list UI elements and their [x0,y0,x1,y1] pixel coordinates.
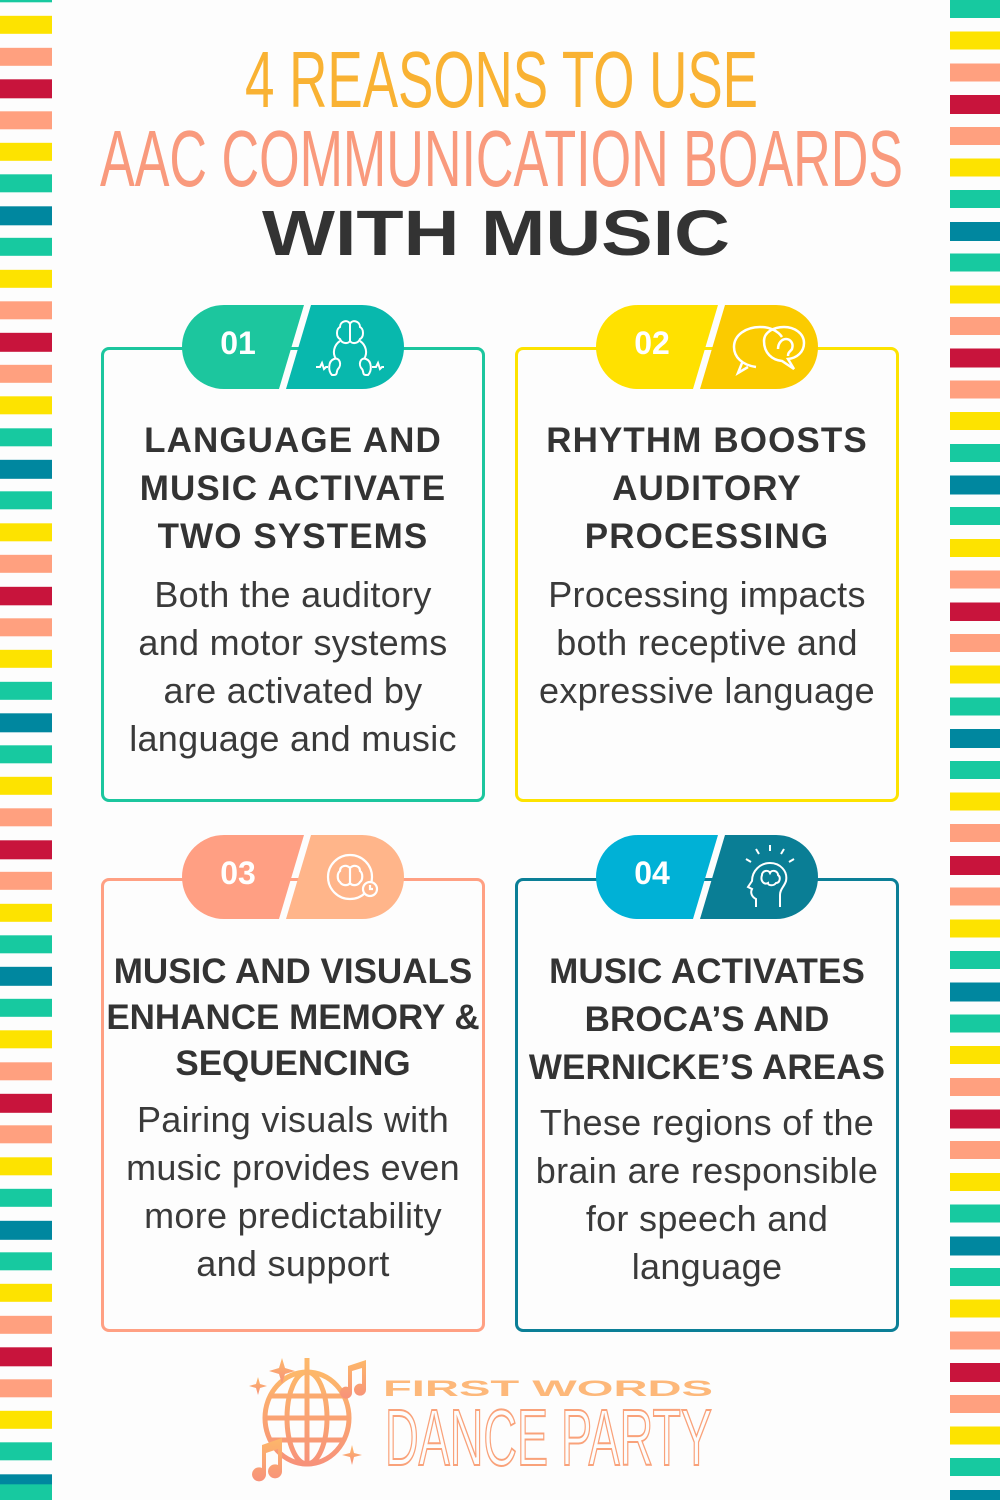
badge 03: 03 [220,855,256,891]
badge 01 [182,305,404,389]
body 3: and support [196,1243,390,1284]
heading 1 [140,421,446,556]
body 1: are activated by [164,670,422,711]
body 1: Both the auditory [154,574,432,615]
heading 2: AUDITORY [612,469,802,508]
icon: brain with clock [328,855,377,899]
badge 02 [596,305,818,389]
logo: First Words Dance Party [249,1358,713,1482]
heading 4: WERNICKE’S AREAS [529,1048,885,1087]
body 2: expressive language [539,670,875,711]
heading 3: SEQUENCING [175,1044,411,1083]
body 4: These regions of the [540,1102,874,1143]
heading 4: MUSIC ACTIVATES [549,952,865,991]
icon: brain and ears [316,321,384,375]
body 4: language [632,1246,782,1287]
body 3 [126,1099,460,1284]
heading 1: MUSIC ACTIVATE [140,469,446,508]
panel: card 2 [515,347,899,802]
badge 02: 02 [634,325,670,361]
title: WITH MUSIC [262,197,730,269]
heading 4: BROCA’S AND [585,1000,829,1039]
body 3: Pairing visuals with [137,1099,449,1140]
logo: First Words Dance Party: FIRST WORDS [383,1376,713,1401]
title [100,35,903,269]
stripes: right border [950,0,1000,1500]
title: 4 REASONS TO USE [245,35,758,124]
badge 04 [596,835,818,919]
body 1: and motor systems [138,622,448,663]
heading 2: PROCESSING [585,517,829,556]
heading 3: MUSIC AND VISUALS [114,952,472,991]
badge 04: 04 [634,855,670,891]
body 2: Processing impacts [548,574,866,615]
heading 2 [546,421,868,556]
panel: card 4 [515,878,899,1332]
panel: card 3 [101,878,485,1332]
body 4: for speech and [586,1198,828,1239]
badge 01: 01 [220,325,256,361]
body 3: music provides even [126,1147,460,1188]
heading 4 [528,952,885,1087]
body 4 [536,1102,878,1287]
body 1 [129,574,457,759]
body 2: both receptive and [556,622,858,663]
icon: speech bubbles with ear [734,327,804,373]
body 4: brain are responsible [536,1150,878,1191]
heading 1: TWO SYSTEMS [158,517,428,556]
body 3: more predictability [144,1195,442,1236]
heading 2: RHYTHM BOOSTS [546,421,868,460]
stripes: left border [0,0,52,1500]
icon: head with brain [746,845,794,907]
badge 03 [182,835,404,919]
icon: disco globe [265,1358,349,1464]
heading 3: ENHANCE MEMORY & [106,998,480,1037]
heading 1: LANGUAGE AND [144,421,442,460]
body 1: language and music [129,718,457,759]
panel: card 1 [101,347,485,802]
heading 3 [106,952,480,1083]
body 2 [539,574,875,711]
